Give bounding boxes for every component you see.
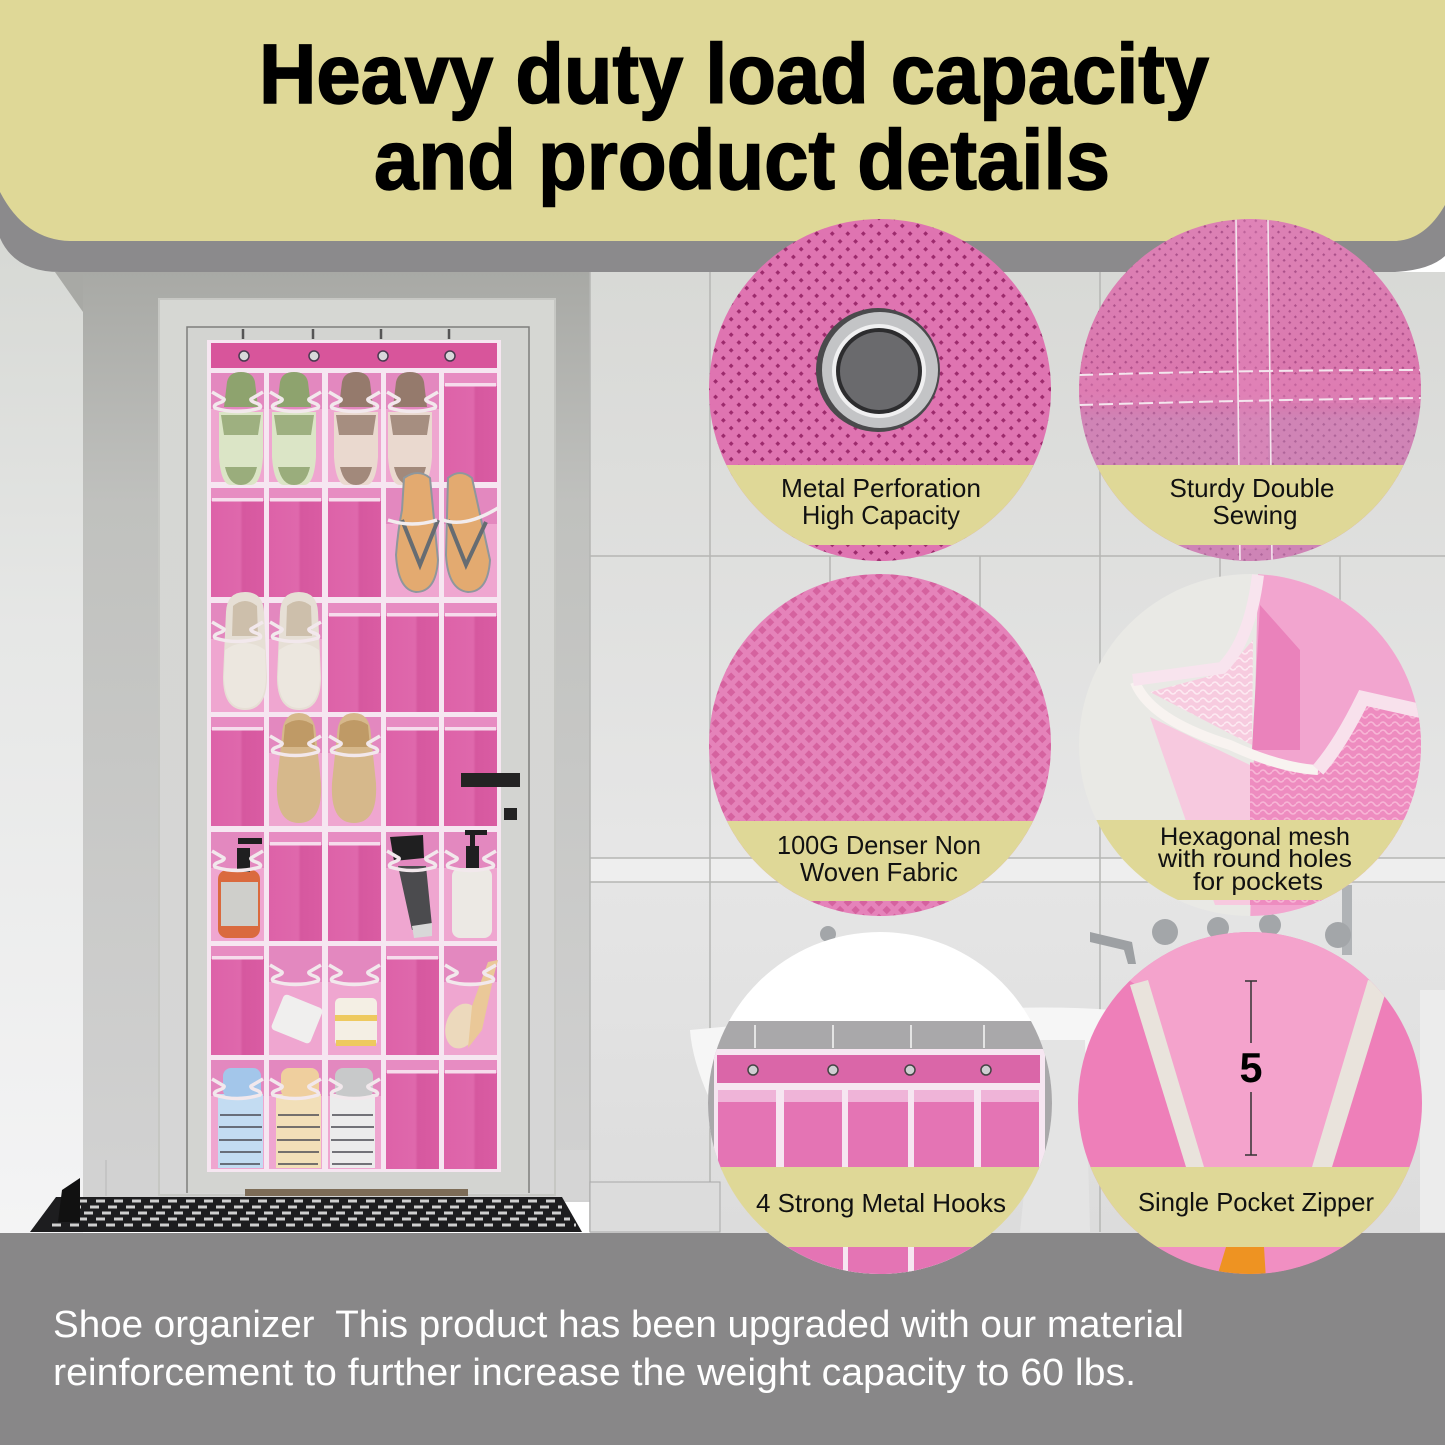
title: Heavy duty load capacity	[259, 27, 1209, 121]
caption: 100G Denser Non	[777, 830, 981, 860]
detail: double sewing	[1070, 210, 1430, 570]
detail: pocket zipper	[1070, 925, 1430, 1280]
detail: hexagonal mesh	[1096, 574, 1421, 916]
green slides	[212, 372, 321, 485]
hanging hooks	[243, 329, 449, 339]
detail: metal hooks	[700, 930, 1060, 1281]
door	[159, 299, 555, 1196]
cosmetics row	[212, 830, 496, 938]
straw sandals	[270, 713, 380, 823]
caption: Hexagonal mesh	[1160, 823, 1350, 851]
header band shadow	[0, 180, 1445, 272]
detail: non woven fabric	[700, 565, 1060, 925]
hooks	[755, 1025, 984, 1048]
rolled towels row	[212, 1068, 380, 1168]
caption: Metal Perforation	[781, 473, 981, 503]
pocket grid	[211, 373, 497, 1169]
flip flops	[388, 473, 498, 592]
detail: metal perforation	[700, 210, 1060, 570]
bathroom background	[0, 230, 1445, 1235]
taupe slides	[329, 372, 438, 485]
caption: with round holes	[1157, 845, 1352, 873]
title	[259, 27, 1209, 207]
door handle	[461, 773, 520, 820]
caption: High Capacity	[802, 500, 960, 530]
floor mat	[30, 1178, 582, 1232]
caption: Sewing	[1212, 500, 1298, 530]
caption: Sturdy Double	[1170, 473, 1334, 503]
dimension marker: 5	[1240, 1044, 1262, 1091]
top band with grommets	[211, 343, 497, 368]
caption: for pockets	[1193, 868, 1323, 896]
title: and product details	[374, 113, 1110, 207]
icon: metal grommet	[816, 308, 940, 432]
footer band	[0, 1233, 1445, 1445]
jars and brush row	[270, 960, 498, 1053]
footer text: reinforcement to further increase the weight capacity to 60 lbs.	[53, 1352, 1136, 1394]
header band	[0, 0, 1445, 241]
footer text: Shoe organizer This product has been upgraded with our material	[53, 1304, 1184, 1346]
shoe organizer	[207, 329, 501, 1172]
caption: Woven Fabric	[800, 857, 958, 887]
caption: Single Pocket Zipper	[1138, 1187, 1374, 1217]
cream slippers	[212, 592, 321, 710]
dimension marker	[1240, 981, 1262, 1155]
caption: 4 Strong Metal Hooks	[756, 1188, 1006, 1218]
